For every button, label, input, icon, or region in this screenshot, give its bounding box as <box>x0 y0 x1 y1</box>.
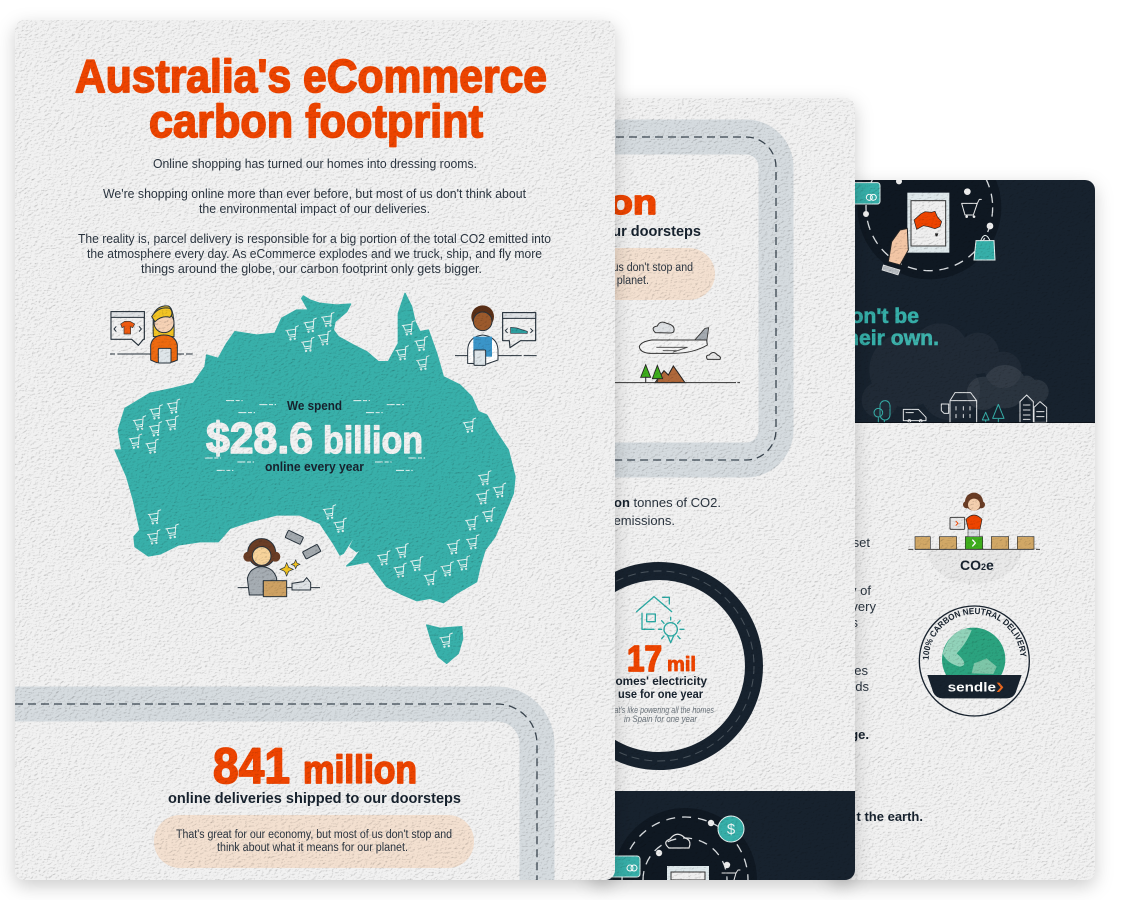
callout pill <box>615 248 715 300</box>
text fragments: offset explanation: every <box>844 599 876 614</box>
statistic: 17 mil homes' electricity: Homes' electricity <box>607 674 707 688</box>
intro text block: Online shopping has turned our homes into dressing rooms. <box>153 156 477 171</box>
scene illustration: tablet orbit with icons <box>855 180 1002 280</box>
statistic: 841 million deliveries (repeated): 841 million <box>453 184 657 222</box>
callout pill: That's great for our economy, but most of us don't stop and <box>176 829 452 841</box>
statistic: 841 million deliveries (repeated): online deliveries shipped to our doorsteps <box>408 223 701 240</box>
statistic: 17 mil homes' electricity: use for one year <box>618 687 703 701</box>
text fragments: offset explanation: ods <box>848 679 869 694</box>
heading: won't be ... on their own <box>855 307 938 346</box>
map headline: we spend $28.6 billion online every year <box>206 399 423 474</box>
statistic: 841 million <box>168 747 460 806</box>
text fragments: offset explanation: es <box>854 663 868 678</box>
map headline: we spend $28.6 billion online every year: $28.6 <box>206 414 313 463</box>
map headline: we spend $28.6 billion online every year: We spend <box>287 399 342 413</box>
road along bottom of page <box>15 704 537 880</box>
label: CO2e: CO2e <box>960 557 994 573</box>
text: million tonnes of CO2 <box>615 498 720 525</box>
text: million tonnes of CO2: million tonnes of CO2. <box>588 495 721 510</box>
illustration: plane over trees and mountains <box>615 322 740 383</box>
heading: won't be ... on their own: their own. <box>839 327 939 350</box>
text fragments: offset explanation <box>855 538 922 821</box>
statistic: 841 million: online deliveries shipped to our doorsteps <box>168 790 461 807</box>
callout pill: think about what it means for our planet. <box>217 842 408 854</box>
intro text block: things around the globe, our carbon footprint only gets bigger. <box>141 261 482 276</box>
title: carbon footprint <box>149 95 483 147</box>
statistic: 17 mil homes' electricity: That's like powering all the homes <box>606 705 714 715</box>
callout pill: think about what it means for our planet. <box>458 275 649 287</box>
icon: woman packing a parcel with cash <box>238 530 321 597</box>
icon: man shopping for shoes on tablet <box>455 305 537 365</box>
text fragments: offset explanation: y of <box>850 583 871 598</box>
intro text block: We're shopping online more than ever before, but most of us don't think about <box>103 186 526 201</box>
scene illustration: clouds and town skyline <box>850 323 1095 422</box>
badge: 100% carbon neutral delivery, Sendle: 100% CARBON NEUTRAL DELIVERY <box>922 608 1026 660</box>
intro text block: the atmosphere every day. As eCommerce explodes and we truck, ship, and fly more <box>87 246 542 261</box>
badge: 100% carbon neutral delivery, Sendle <box>918 605 1030 717</box>
dark band with orbit icons <box>590 791 855 880</box>
statistic: 17 mil homes' electricity <box>615 645 714 724</box>
text: million tonnes of CO2: emissions. <box>614 513 675 528</box>
title: Australia's eCommerce <box>75 50 547 102</box>
intro text block: the environmental impact of our deliveries. <box>199 201 430 216</box>
intro text block: The reality is, parcel delivery is responsible for a big portion of the total CO2 emitted into <box>78 231 551 246</box>
road loop with dashed centre line <box>590 137 776 460</box>
intro text block <box>78 156 551 276</box>
heading: won't be ... on their own: won't be <box>833 305 919 328</box>
title <box>75 50 547 147</box>
panel: page 3, dark scene and carbon neutral section <box>825 178 1104 894</box>
icon: woman shopping for a t-shirt on tablet <box>110 306 193 363</box>
statistic: 17 mil homes' electricity: 17 <box>627 638 662 679</box>
badge: 100% carbon neutral delivery, Sendle: sendle <box>948 680 996 695</box>
map headline: we spend $28.6 billion online every year: billion <box>323 420 423 462</box>
statistic: 841 million: million <box>303 749 417 792</box>
text fragments: offset explanation: s <box>852 615 858 630</box>
callout pill <box>154 815 474 868</box>
text fragments: offset explanation: offset <box>838 535 870 550</box>
dark band with orbit icons: $ <box>727 821 736 838</box>
map of Australia with shopping carts <box>115 293 515 663</box>
statistic: 841 million deliveries (repeated) <box>615 194 700 239</box>
illustration: worker scanning parcels on conveyor <box>908 492 1040 550</box>
icon: home and light bulb <box>637 597 684 643</box>
text fragments: offset explanation: ge. <box>850 727 869 742</box>
statistic: 17 mil homes' electricity: mil <box>667 654 696 676</box>
panel: page 1, title, map and road <box>15 20 615 880</box>
statistic: 17 mil homes' electricity: in Spain for one year <box>624 714 698 724</box>
statistic: 841 million: 841 <box>213 738 290 794</box>
ring road around statistic <box>615 562 763 770</box>
text fragments: offset explanation: t the earth. <box>857 809 923 824</box>
map headline: we spend $28.6 billion online every year: online every year <box>265 460 364 474</box>
callout pill: That's great for our economy, but most of us don't stop and <box>417 262 693 274</box>
panel: page 2, road, statistics and ring <box>585 96 864 894</box>
